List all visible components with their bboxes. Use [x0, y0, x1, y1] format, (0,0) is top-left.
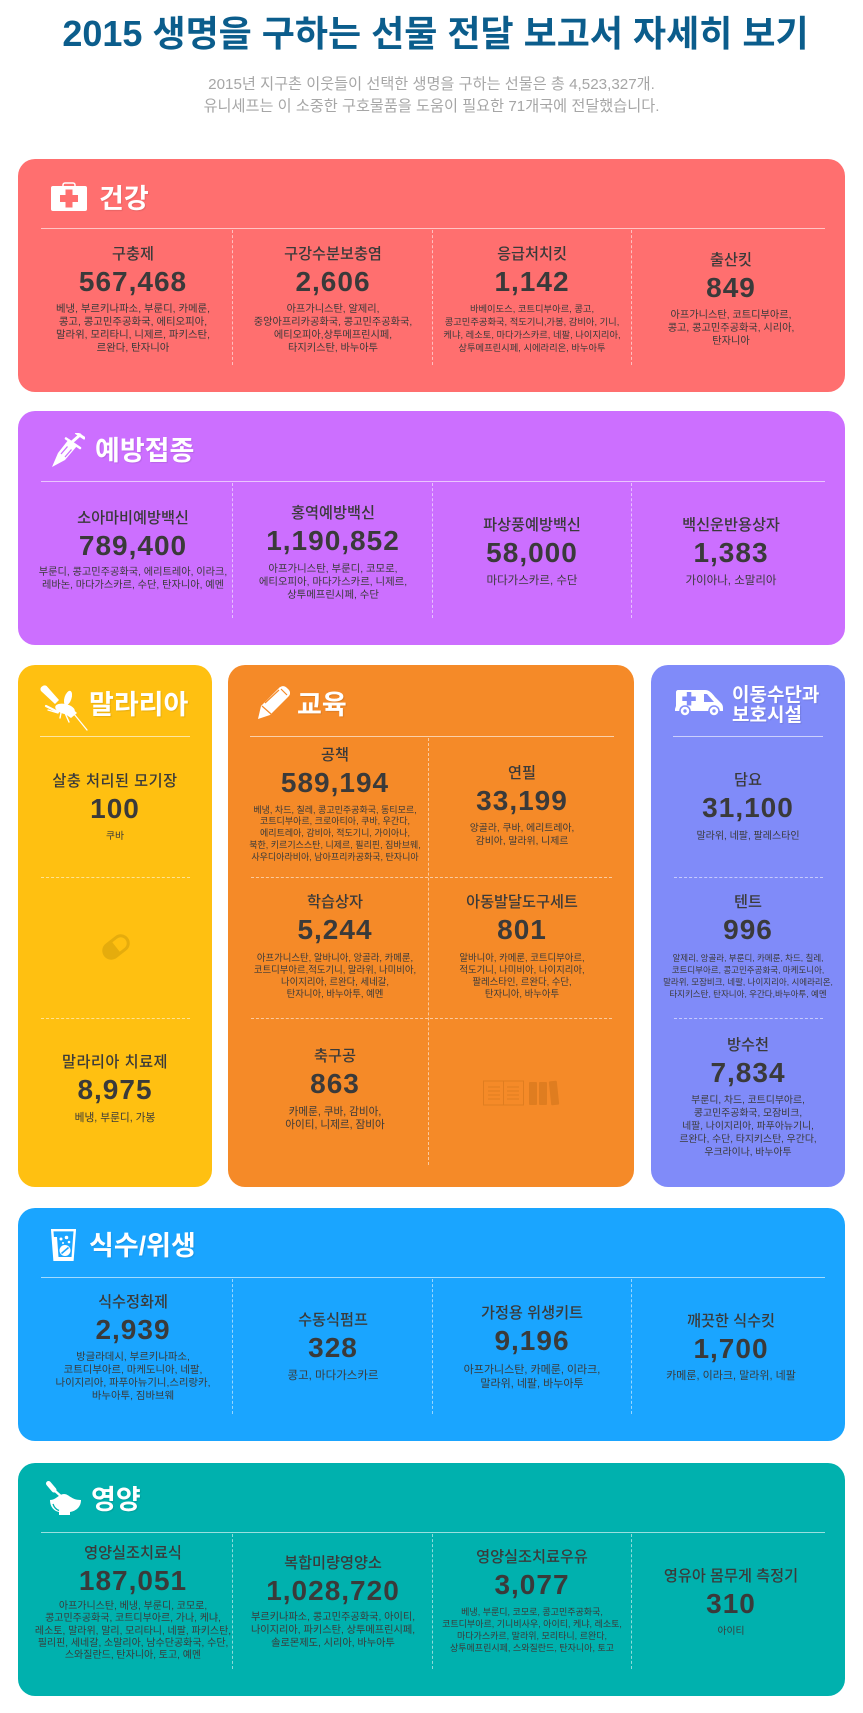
item: 공책: 베냉, 차드, 칠레, 콩고민주공화국, 동티모르, — [253, 804, 417, 814]
item: 식수정화제 — [56, 1294, 210, 1402]
item: 복합미량영양소: 나이지리아, 파키스탄, 상투메프린시페, — [251, 1624, 415, 1636]
item: 식수정화제: 코트디부아르, 마케도니아, 네팔, — [64, 1364, 202, 1376]
item: 소아마비예방백신: 789,400 — [79, 530, 187, 561]
panel: 예방접종 — [18, 411, 845, 645]
panel: 말라리아 — [18, 665, 212, 1187]
item: 학습상자: 탄자니아, 바누아투, 예멘 — [287, 988, 383, 999]
item: 소아마비예방백신: 레바논, 마다가스카르, 수단, 탄자니아, 예멘 — [42, 580, 224, 591]
item: 학습상자 — [254, 894, 416, 999]
item: 영양실조치료식 — [35, 1545, 231, 1661]
item: 담요: 31,100 — [702, 792, 794, 823]
item: 깨끗한 식수킷 — [666, 1313, 796, 1382]
item: 아동발달도구세트: 탄자니아, 바누아투 — [485, 988, 559, 999]
item: 텐트: 텐트 — [734, 894, 762, 911]
icon: pill — [102, 934, 130, 960]
item: 식수정화제: 나이지리아, 파푸아뉴기니,스리랑카, — [56, 1378, 210, 1388]
subtitle text — [204, 76, 659, 115]
item: 깨끗한 식수킷: 깨끗한 식수킷 — [687, 1313, 775, 1330]
item: 텐트: 타지키스탄, 탄자니아, 우간다,바누아투, 예멘 — [669, 989, 827, 999]
item: 구강수분보충염: 에티오피아,상투메프린시페, — [274, 330, 392, 340]
item: 학습상자: 아프가니스탄, 알바니아, 앙골라, 카메룬, — [257, 952, 413, 963]
panel: 영양 — [18, 1463, 845, 1696]
item: 공책: 사우디아라비아, 남아프리카공화국, 탄자니아 — [251, 852, 419, 862]
icon: bowl and spoon — [46, 1481, 81, 1515]
heading: 이동수단과 보호시설: 보호시설 — [732, 704, 802, 726]
item: 방수천: 콩고민주공화국, 모잠비크, — [694, 1108, 802, 1119]
item: 응급처치킷: 상투메프린시페, 시에라리온, 바누아투 — [458, 342, 606, 352]
heading: 예방접종: 예방접종 — [95, 436, 194, 466]
item: 살충 처리된 모기장: 살충 처리된 모기장 — [52, 773, 178, 790]
item: 아동발달도구세트: 아동발달도구세트 — [466, 894, 578, 911]
item: 방수천: 방수천 — [727, 1037, 769, 1054]
item: 소아마비예방백신 — [39, 510, 227, 591]
item: 텐트: 말라위, 모잠비크, 네팔, 나이지리아, 시에라리온, — [663, 977, 833, 987]
item: 축구공: 아이티, 니제르, 잠비아 — [285, 1118, 385, 1130]
item: 방수천: 네팔, 나이지리아, 파푸아뉴기니, — [682, 1121, 814, 1132]
item: 가정용 위생키트 — [464, 1305, 600, 1390]
item: 연필: 연필 — [508, 765, 536, 782]
item: 공책: 코트디부아르, 크로아티아, 쿠바, 우간다, — [260, 816, 410, 826]
icon: syringe — [52, 433, 85, 467]
item: 영양실조치료식: 레소토, 말라위, 말리, 모리타니, 네팔, 파키스탄, — [35, 1626, 231, 1637]
item: 영양실조치료우유: 코트디부아르, 기니비사우, 아이티, 케냐, 레소토, — [442, 1619, 622, 1629]
item: 백신운반용상자 — [682, 517, 780, 586]
heading: 교육: 교육 — [297, 690, 347, 720]
item: 아동발달도구세트: 적도기니, 나미비아, 나이지리아, — [459, 964, 585, 975]
item: 파상풍예방백신: 58,000 — [486, 537, 578, 568]
item: 아동발달도구세트: 801 — [497, 914, 547, 945]
item: 영양실조치료식: 스와질란드, 탄자니아, 토고, 예멘 — [65, 1650, 201, 1661]
item: 영양실조치료식: 콩고민주공화국, 코트디부아르, 가나, 케냐, — [45, 1613, 221, 1624]
item: 학습상자: 학습상자 — [307, 894, 363, 911]
item: 영유아 몸무게 측정기 — [664, 1568, 798, 1636]
item: 방수천: 우크라이나, 바누아투 — [704, 1147, 792, 1158]
item: 담요: 담요 — [734, 772, 762, 789]
item: 연필: 감비아, 말라위, 니제르 — [476, 836, 568, 846]
item: 영양실조치료우유: 마다가스카르, 말라위, 모리타니, 르완다, — [457, 1631, 607, 1641]
icon: pencil — [258, 686, 290, 719]
item: 복합미량영양소 — [251, 1554, 415, 1648]
item: 아동발달도구세트 — [459, 894, 585, 999]
item: 구강수분보충염: 아프가니스탄, 알제리, — [287, 304, 379, 314]
item: 구충제: 콩고, 콩고민주공화국, 에티오피아, — [59, 316, 207, 328]
item: 식수정화제: 2,939 — [95, 1314, 171, 1345]
item: 연필 — [470, 765, 574, 846]
heading: 말라리아: 말라리아 — [89, 690, 188, 720]
item: 공책: 공책 — [321, 747, 349, 764]
item: 백신운반용상자: 가이아나, 소말리아 — [685, 574, 777, 586]
item: 홍역예방백신: 에티오피아, 마다가스카르, 니제르, — [259, 576, 407, 588]
item: 응급처치킷: 콩고민주공화국, 적도기니,가봉, 감비아, 기니, — [445, 316, 619, 326]
item: 말라리아 치료제 — [62, 1054, 168, 1124]
item: 응급처치킷: 바베이도스, 코트디부아르, 콩고, — [470, 304, 594, 314]
item: 공책: 589,194 — [281, 767, 389, 798]
item: 구강수분보충염: 타지키스탄, 바누아투 — [288, 342, 378, 354]
item: 출산킷: 아프가니스탄, 코트디부아르, — [671, 310, 791, 321]
item: 수동식펌프: 328 — [308, 1332, 358, 1363]
item: 복합미량영양소: 솔로몬제도, 시리아, 바누아투 — [271, 1638, 395, 1648]
item: 수동식펌프 — [287, 1312, 379, 1382]
icon: ambulance — [675, 690, 723, 716]
item: 축구공: 863 — [310, 1068, 360, 1099]
icon: mosquito — [40, 685, 88, 731]
item: 방수천: 부룬디, 차드, 코트디부아르, — [691, 1095, 805, 1106]
item: 학습상자: 나이지리아, 르완다, 세네갈, — [281, 976, 389, 987]
item: 복합미량영양소: 부르키나파소, 콩고민주공화국, 아이티, — [251, 1612, 415, 1622]
item: 텐트: 알제리, 앙골라, 부룬디, 카메룬, 차드, 칠레, — [672, 953, 824, 963]
item: 수동식펌프: 수동식펌프 — [298, 1312, 368, 1329]
item: 영양실조치료식: 187,051 — [79, 1565, 187, 1596]
item: 텐트: 996 — [723, 914, 773, 945]
icon: medical kit — [51, 182, 87, 211]
item: 영양실조치료우유: 3,077 — [494, 1569, 570, 1600]
item: 홍역예방백신: 아프가니스탄, 부룬디, 코모로, — [268, 564, 398, 574]
item: 말라리아 치료제: 말라리아 치료제 — [62, 1054, 168, 1071]
item: 가정용 위생키트: 9,196 — [494, 1325, 570, 1356]
item: 파상풍예방백신: 파상풍예방백신 — [483, 517, 581, 534]
subtitle text: 2015년 지구촌 이웃들이 선택한 생명을 구하는 선물은 총 4,523,327개. — [208, 76, 655, 92]
item: 살충 처리된 모기장 — [52, 773, 178, 842]
item: 가정용 위생키트: 아프가니스탄, 카메룬, 이라크, — [464, 1364, 600, 1376]
item: 응급처치킷 — [443, 246, 621, 352]
item: 소아마비예방백신: 소아마비예방백신 — [77, 510, 189, 527]
panel: 식수/위생 — [18, 1208, 845, 1441]
item: 축구공: 카메룬, 쿠바, 감비아, — [289, 1106, 381, 1118]
item: 축구공 — [285, 1048, 385, 1130]
heading: 영양: 영양 — [91, 1485, 141, 1515]
heading: 이동수단과 보호시설: 이동수단과 — [732, 684, 819, 706]
item: 백신운반용상자: 백신운반용상자 — [682, 517, 780, 534]
item: 학습상자: 5,244 — [297, 914, 373, 945]
item: 학습상자: 코트디부아르,적도기니, 말라위, 나미비아, — [254, 964, 416, 975]
item: 아동발달도구세트: 팔레스타인, 르완다, 수단, — [472, 976, 572, 987]
item: 영유아 몸무게 측정기: 아이티 — [717, 1626, 745, 1636]
item: 담요 — [696, 772, 800, 842]
item: 식수정화제: 방글라데시, 부르키나파소, — [76, 1352, 190, 1362]
panel: 교육 — [228, 665, 634, 1187]
heading: 건강: 건강 — [99, 184, 149, 214]
item: 구강수분보충염 — [254, 246, 412, 354]
item: 공책: 에리트레아, 감비아, 적도기니, 가이아나, — [260, 828, 410, 838]
item: 깨끗한 식수킷: 1,700 — [693, 1333, 769, 1364]
item: 가정용 위생키트: 말라위, 네팔, 바누아투 — [480, 1378, 584, 1390]
item: 구충제: 567,468 — [79, 266, 187, 297]
item: 연필: 33,199 — [476, 785, 568, 816]
item: 출산킷 — [668, 252, 794, 347]
item: 구충제: 르완다, 탄자니아 — [97, 342, 169, 354]
item: 파상풍예방백신 — [483, 517, 581, 586]
item: 텐트 — [663, 894, 833, 999]
item: 공책: 북한, 키르기스스탄, 니제르, 필리핀, 짐바브웨, — [249, 840, 421, 850]
heading: 식수/위생: 식수/위생 — [89, 1231, 196, 1261]
item: 파상풍예방백신: 마다가스카르, 수단 — [486, 574, 578, 586]
item: 영유아 몸무게 측정기: 영유아 몸무게 측정기 — [664, 1568, 798, 1585]
item: 가정용 위생키트: 가정용 위생키트 — [481, 1305, 583, 1322]
item: 식수정화제: 식수정화제 — [98, 1294, 168, 1311]
title: 2015 생명을 구하는 선물 전달 보고서 자세히 보기 — [62, 13, 809, 54]
item: 소아마비예방백신: 부룬디, 콩고민주공화국, 에리트레아, 이라크, — [39, 567, 227, 578]
item: 복합미량영양소: 1,028,720 — [266, 1575, 400, 1606]
item: 말라리아 치료제: 베냉, 부룬디, 가봉 — [75, 1112, 155, 1124]
item: 영양실조치료우유: 베냉, 부룬디, 코모로, 콩고민주공화국, — [461, 1607, 603, 1617]
item: 홍역예방백신: 1,190,852 — [266, 525, 400, 556]
item: 영양실조치료식: 아프가니스탄, 베냉, 부룬디, 코모로, — [59, 1601, 207, 1612]
item: 연필: 앙골라, 쿠바, 에리트레아, — [470, 822, 574, 834]
item: 수동식펌프: 콩고, 마다가스카르 — [287, 1370, 379, 1382]
item: 아동발달도구세트: 알바니아, 카메룬, 코트디부아르, — [459, 952, 585, 963]
item: 백신운반용상자: 1,383 — [693, 537, 769, 568]
item: 출산킷: 콩고, 콩고민주공화국, 시리아, — [668, 323, 794, 334]
item: 영양실조치료우유: 상투메프린시페, 스와질란드, 탄자니아, 토고 — [450, 1643, 614, 1653]
item: 말라리아 치료제: 8,975 — [77, 1074, 153, 1105]
item: 영양실조치료식: 필리핀, 세네갈, 소말리아, 남수단공화국, 수단, — [38, 1638, 228, 1649]
heading: 이동수단과 보호시설 — [732, 684, 820, 726]
item: 응급처치킷: 응급처치킷 — [497, 246, 567, 263]
item: 방수천: 7,834 — [710, 1057, 786, 1088]
item: 구충제: 구충제 — [112, 246, 154, 263]
item: 텐트: 코트디부아르, 콩고민주공화국, 마케도니아, — [672, 965, 824, 975]
item: 방수천: 르완다, 수단, 타지키스탄, 우간다, — [679, 1134, 817, 1145]
item: 구강수분보충염: 중앙아프리카공화국, 콩고민주공화국, — [254, 316, 412, 328]
item: 응급처치킷: 케냐, 레소토, 마다가스카르, 네팔, 나이지리아, — [443, 330, 621, 340]
item: 방수천 — [679, 1037, 817, 1158]
item: 살충 처리된 모기장: 쿠바 — [106, 830, 124, 842]
icon: water glass — [51, 1229, 76, 1261]
item: 영양실조치료우유: 영양실조치료우유 — [476, 1549, 588, 1566]
item: 영양실조치료우유 — [442, 1549, 622, 1653]
panel: 이동수단과 보호시설 — [651, 665, 845, 1187]
item: 출산킷: 849 — [706, 272, 756, 303]
item: 식수정화제: 바누아투, 짐바브웨 — [92, 1390, 174, 1402]
item: 구충제: 베냉, 부르키나파소, 부룬디, 카메룬, — [56, 304, 210, 314]
item: 복합미량영양소: 복합미량영양소 — [284, 1555, 382, 1572]
item: 출산킷: 탄자니아 — [712, 336, 750, 347]
item: 구강수분보충염: 구강수분보충염 — [284, 246, 382, 263]
item: 홍역예방백신: 상투메프린시페, 수단 — [287, 590, 379, 600]
icon: books — [483, 1080, 559, 1106]
item: 담요: 말라위, 네팔, 팔레스타인 — [696, 830, 800, 842]
item: 축구공: 축구공 — [314, 1048, 356, 1065]
item: 출산킷: 출산킷 — [710, 252, 752, 269]
item: 공책 — [249, 747, 421, 862]
item: 살충 처리된 모기장: 100 — [90, 793, 140, 824]
item: 홍역예방백신 — [259, 504, 407, 600]
subtitle text: 유니세프는 이 소중한 구호물품을 도움이 필요한 71개국에 전달했습니다. — [204, 98, 659, 115]
panel: 건강 — [18, 159, 845, 392]
item: 홍역예방백신: 홍역예방백신 — [291, 505, 375, 522]
item: 구강수분보충염: 2,606 — [295, 266, 371, 297]
item: 구충제: 말라위, 모리타니, 니제르, 파키스탄, — [56, 330, 210, 340]
item: 구충제 — [56, 246, 210, 354]
item: 깨끗한 식수킷: 카메룬, 이라크, 말라위, 네팔 — [666, 1370, 796, 1382]
item: 영유아 몸무게 측정기: 310 — [706, 1588, 756, 1619]
item: 응급처치킷: 1,142 — [494, 266, 570, 297]
item: 영양실조치료식: 영양실조치료식 — [84, 1545, 182, 1562]
